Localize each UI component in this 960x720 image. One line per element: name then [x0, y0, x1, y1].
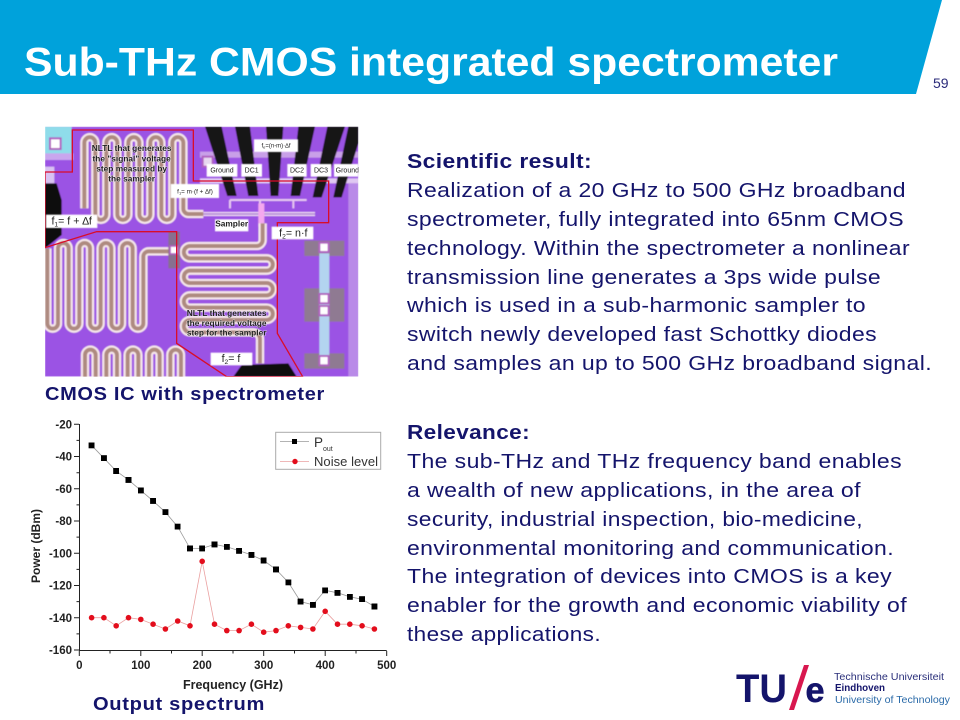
chip annotation labels: DC2: [290, 168, 304, 175]
chip annotation labels: step for the sampler: [187, 328, 267, 338]
chip annotation labels: = m·(f + ∆f): [181, 188, 213, 195]
chip annotation labels: f: [261, 143, 263, 149]
chip annotation labels: =(n-m)·∆f: [265, 142, 291, 149]
logo: TU/e Technische Universiteit Eindhoven: Eindhoven: [835, 683, 885, 694]
chip annotation labels: f: [51, 216, 54, 228]
text block: relevance: these applications.: [407, 623, 601, 646]
chip annotation labels: NLTL that generates: [92, 143, 172, 153]
chip annotation labels: 1: [179, 191, 182, 196]
x axis tick labels: 100: [131, 660, 150, 672]
chip annotation labels: NLTL that generates: [187, 308, 267, 318]
chip annotation labels: e: [263, 145, 266, 150]
chip annotation labels: Sampler: [215, 218, 249, 228]
logo: TU/e Technische Universiteit Eindhoven: e: [806, 671, 824, 710]
chip annotation labels: [51, 142, 359, 366]
text block: relevance: The integration of devices into CMOS is a key: [407, 565, 892, 588]
caption: output spectrum: Output spectrum: [93, 694, 265, 714]
text block: scientific result: Scientific result:: [407, 150, 592, 173]
chip annotation labels: 2: [282, 234, 286, 241]
y axis tick labels: -80: [55, 516, 72, 528]
logo: TU/e Technische Universiteit Eindhoven: University of Technology: [835, 695, 950, 706]
x axis title: Frequency (GHz): [183, 678, 283, 692]
top right pads and wires: [200, 152, 358, 158]
sampler line: [203, 211, 316, 217]
text block: scientific result: transmission line generates a 3ps wide pulse: [407, 266, 881, 289]
right edge strip: [348, 183, 358, 377]
text block: relevance: The sub-THz and THz frequency band enables: [407, 450, 902, 473]
chip annotation labels: step measured by: [96, 164, 167, 174]
legend: [276, 432, 381, 469]
header banner: [0, 0, 942, 94]
y axis tick labels: -40: [55, 452, 72, 464]
y axis tick labels: -20: [55, 420, 72, 432]
text block: scientific result: which is used in a sub-harmonic sampler to: [406, 294, 866, 317]
text block: scientific result: [406, 150, 932, 375]
chart: output spectrum: [29, 420, 396, 692]
x axis tick labels: 300: [254, 660, 273, 672]
chart axes: [74, 424, 387, 656]
chip annotation labels: the "signal" voltage: [93, 153, 171, 163]
series: Pout: [92, 445, 374, 606]
right side test structures: [304, 241, 344, 256]
y axis tick labels: -140: [49, 613, 72, 625]
text block: relevance: a wealth of new applications, in the area of: [407, 479, 861, 502]
logo: TU/e Technische Universiteit Eindhoven: [736, 665, 950, 711]
caption: CMOS IC with spectrometer: CMOS IC with spectrometer: [45, 384, 325, 404]
text block: relevance: [407, 421, 907, 646]
text block: relevance: Relevance:: [407, 421, 530, 444]
legend: Noise level: [314, 454, 378, 469]
text block: relevance: enabler for the growth and economic viability of: [407, 594, 907, 617]
y axis tick labels: -60: [55, 484, 72, 496]
text block: scientific result: and samples an up to 500 GHz broadband signal.: [407, 352, 932, 375]
chip annotation labels: = n·f: [286, 228, 308, 240]
label boxes: [46, 139, 358, 365]
chip annotation labels: 1: [54, 222, 58, 229]
page number: 59: [933, 75, 949, 91]
chip annotation labels: 2: [225, 359, 229, 366]
y axis tick labels: -100: [49, 548, 72, 560]
chip annotation labels: = f + ∆f: [58, 216, 92, 228]
chip annotation labels: = f: [228, 353, 240, 365]
title: Sub-THz CMOS integrated spectrometer: [24, 40, 838, 84]
chip annotation labels: the sampler: [108, 173, 156, 183]
logo: TU/e Technische Universiteit Eindhoven: Technische Universiteit: [834, 672, 944, 683]
black probe contacts left and bottom: [45, 183, 62, 248]
chip annotation labels: f: [279, 228, 282, 240]
photo: CMOS IC with spectrometer: [45, 127, 359, 380]
x axis tick labels: 0: [76, 660, 83, 672]
series: Noise level: [92, 561, 374, 632]
text block: scientific result: technology. Within the spectrometer a nonlinear: [407, 237, 910, 260]
text block: relevance: environmental monitoring and communication.: [407, 537, 894, 560]
chip annotation labels: DC1: [245, 168, 259, 175]
chip annotation labels: Ground: [336, 168, 359, 175]
y axis tick labels: -120: [49, 581, 72, 593]
red outlines: [45, 130, 329, 377]
central pad: [168, 232, 180, 268]
x axis tick labels: 400: [316, 660, 335, 672]
text block: scientific result: Realization of a 20 GHz to 500 GHz broadband: [407, 179, 906, 202]
text block: scientific result: switch newly developed fast Schottky diodes: [407, 323, 877, 346]
y axis title: Power (dBm): [29, 509, 43, 583]
y axis tick labels: -160: [49, 645, 72, 657]
logo: TU/e Technische Universiteit Eindhoven: TU: [736, 667, 787, 711]
legend: out: [323, 446, 333, 453]
chip annotation labels: Ground: [210, 168, 234, 175]
chip annotation labels: f: [177, 188, 179, 195]
x axis tick labels: [76, 660, 396, 672]
y axis tick labels: [49, 420, 72, 657]
text block: scientific result: spectrometer, fully integrated into 65nm CMOS: [407, 208, 904, 231]
chip annotation labels: the required voltage: [187, 318, 267, 328]
legend: P: [314, 435, 323, 450]
chip annotation labels: DC3: [314, 168, 328, 175]
text block: relevance: security, industrial inspection, bio-medicine,: [407, 508, 863, 531]
chip annotation labels: f: [222, 353, 225, 365]
x axis tick labels: 200: [193, 660, 212, 672]
meander outer (NLTL lines): [47, 137, 273, 380]
x axis tick labels: 500: [377, 660, 396, 672]
